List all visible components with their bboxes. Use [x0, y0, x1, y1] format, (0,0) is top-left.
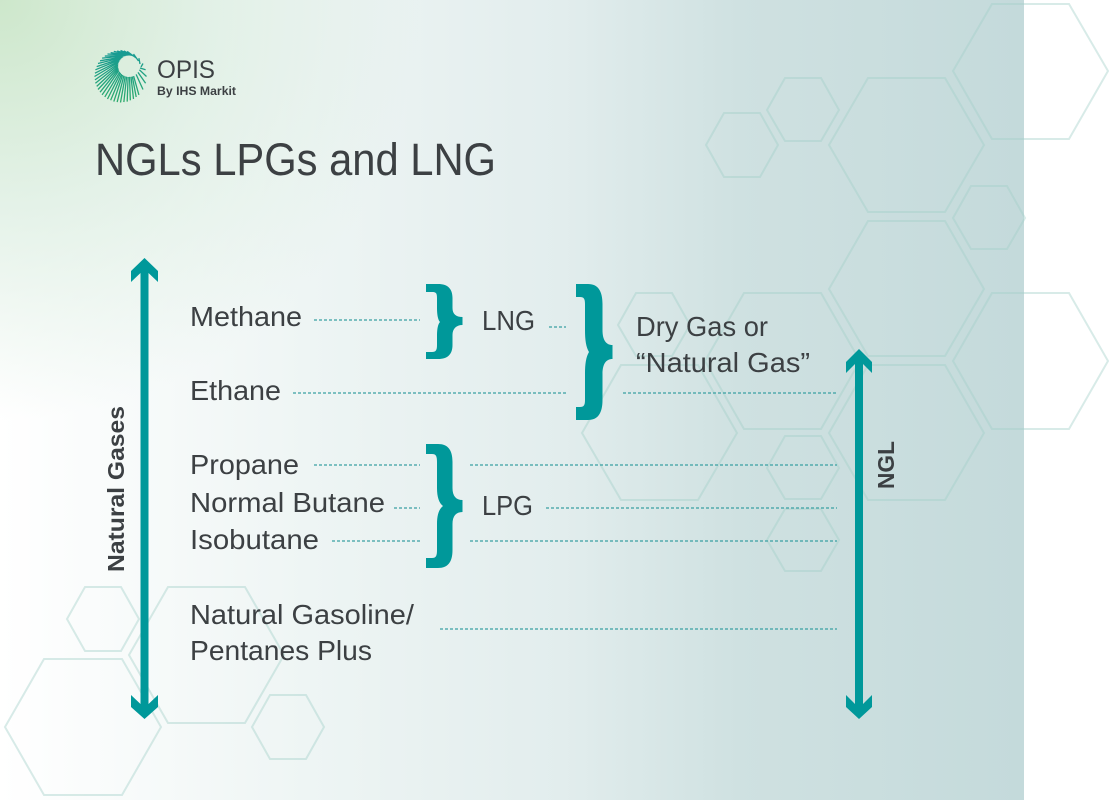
- gas: Methane: Methane: [190, 301, 302, 332]
- gas: Propane: Propane: [190, 449, 299, 480]
- label: Natural Gas: “Natural Gas”: [636, 347, 810, 378]
- brace: LNG: [426, 284, 462, 359]
- label: LNG: LNG: [482, 305, 535, 336]
- logo wordmark: OPIS: [157, 56, 215, 84]
- gas: Ethane: Ethane: [190, 375, 281, 406]
- gas: Normal Butane: Normal Butane: [190, 487, 385, 518]
- gas: Natural Gasoline / Pentanes Plus: Natural Gasoline/: [190, 599, 414, 630]
- label: Natural Gases: Natural Gases: [103, 406, 129, 572]
- logo: OPIS By IHS Markit: [94, 50, 236, 102]
- brace: LPG: [426, 444, 462, 568]
- group labels: [482, 305, 810, 521]
- gas: Pentanes Plus: Pentanes Plus: [190, 635, 372, 666]
- gas: Isobutane: Isobutane: [190, 524, 319, 555]
- title: NGLs LPGs and LNG: [95, 134, 496, 185]
- logo tagline: By IHS Markit: [157, 84, 236, 98]
- gas names: [190, 301, 414, 666]
- arrow: Natural Gases: [131, 258, 158, 719]
- brace: Dry Gas: [576, 284, 612, 420]
- label: LPG: LPG: [482, 490, 533, 521]
- dotted leader lines: [293, 320, 837, 629]
- arrow: NGL: [846, 349, 872, 719]
- label: NGL: NGL: [873, 441, 899, 489]
- label: Dry Gas or: Dry Gas or: [636, 311, 768, 342]
- icon: OPIS sunburst: [94, 50, 146, 102]
